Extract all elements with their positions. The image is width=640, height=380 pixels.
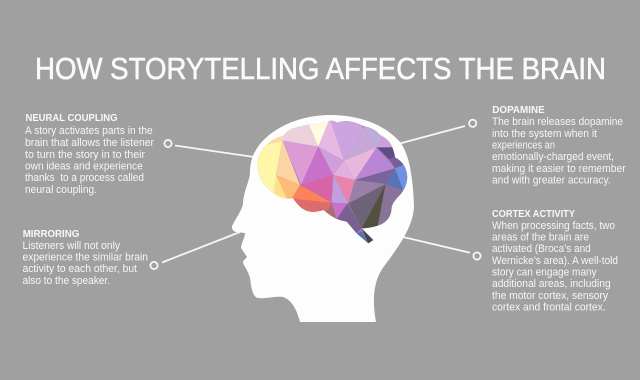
- body: dopamine: and with greater accuracy.: [492, 174, 611, 186]
- connector: cortex activity: [403, 237, 481, 260]
- body: neural coupling: thanks to a process called: [25, 172, 144, 184]
- infographic canvas: [22, 58, 626, 322]
- body: cortex activity: cortex and frontal cortex.: [492, 302, 606, 314]
- body: mirroring: [22, 240, 148, 287]
- heading: neural coupling: NEURAL COUPLING: [26, 112, 118, 124]
- body: mirroring: also to the speaker.: [22, 275, 110, 287]
- text block: neural coupling: [25, 112, 154, 196]
- connector: dopamine: [398, 120, 476, 144]
- connector: mirroring: [150, 232, 240, 269]
- body: mirroring: experience the similar brain: [22, 252, 148, 264]
- heading: dopamine: DOPAMINE: [492, 104, 545, 116]
- body: neural coupling: A story activates parts in the: [25, 125, 153, 137]
- body: cortex activity: story can engage many: [492, 266, 597, 278]
- body: neural coupling: neural coupling.: [25, 184, 97, 196]
- body: dopamine: experiences an: [492, 140, 555, 152]
- body: dopamine: into the system when it: [492, 128, 597, 140]
- heading: cortex activity: CORTEX ACTIVITY: [492, 208, 575, 220]
- text block: cortex activity: [492, 208, 618, 314]
- body: neural coupling: brain that allows the listener: [25, 137, 154, 149]
- body: dopamine: emotionally-charged event,: [492, 151, 614, 163]
- text block: dopamine: [492, 104, 626, 186]
- body: dopamine: making it easier to remember: [492, 163, 626, 175]
- heading: mirroring: MIRRORING: [23, 228, 79, 240]
- head silhouette: [232, 115, 414, 322]
- body: cortex activity: the motor cortex, sensory: [492, 290, 608, 302]
- body: neural coupling: [25, 125, 154, 196]
- body: cortex activity: activated (Broca’s and: [492, 243, 591, 255]
- body: cortex activity: areas of the brain are: [492, 232, 589, 244]
- low-poly brain: [257, 120, 408, 244]
- body: dopamine: [492, 116, 626, 186]
- connector: neural coupling: [164, 140, 254, 157]
- body: dopamine: The brain releases dopamine: [492, 116, 623, 128]
- body: neural coupling: own ideas and experience: [25, 160, 143, 172]
- text block: mirroring: [22, 228, 148, 287]
- body: mirroring: activity to each other, but: [22, 263, 137, 275]
- body: cortex activity: [492, 220, 618, 314]
- body: cortex activity: additional areas, including: [492, 278, 611, 290]
- body: mirroring: Listeners will not only: [22, 240, 120, 252]
- body: cortex activity: Wernicke’s area). A well-told: [492, 255, 618, 267]
- body: neural coupling: to turn the story in to their: [25, 149, 145, 161]
- body: cortex activity: When processing facts, two: [492, 220, 615, 232]
